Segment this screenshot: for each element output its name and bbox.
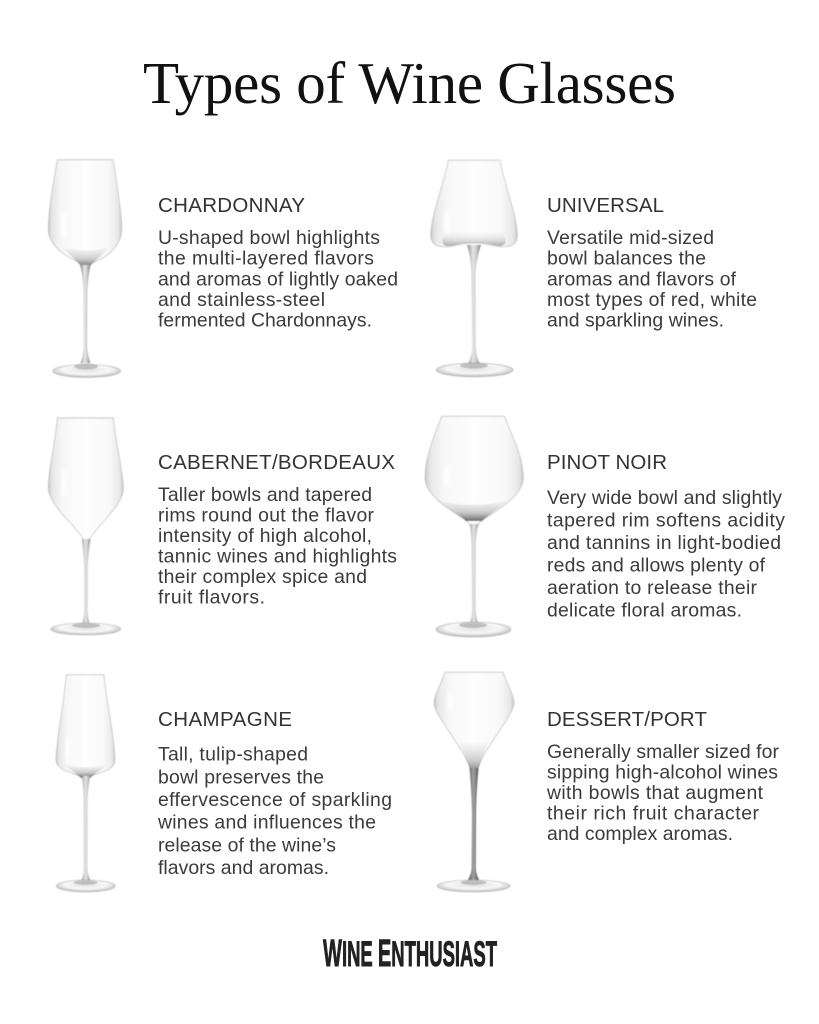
heading: cabernet bordeaux: CABERNET/BORDEAUX bbox=[158, 451, 395, 474]
heading: chardonnay: CHARDONNAY bbox=[158, 194, 305, 217]
text block: cabernet bordeaux: fruit flavors. bbox=[158, 586, 265, 608]
text block: universal bbox=[547, 227, 757, 332]
panel: chardonnay bbox=[48, 160, 398, 378]
icon: chardonnay glass bbox=[48, 160, 122, 378]
text block: chardonnay: and aromas of lightly oaked bbox=[158, 268, 398, 290]
text block: champagne: wines and influences the bbox=[157, 812, 376, 834]
text block: dessert port bbox=[546, 741, 780, 845]
icon: cabernet glass bbox=[48, 418, 123, 635]
panel: universal bbox=[431, 160, 757, 377]
text block: dessert port: sipping high-alcohol wines bbox=[547, 762, 778, 784]
heading: dessert port: DESSERT/PORT bbox=[547, 708, 707, 731]
text block: champagne: effervescence of sparkling bbox=[158, 789, 392, 811]
text block: pinot noir: delicate floral aromas. bbox=[547, 600, 742, 622]
icon: champagne glass bbox=[56, 674, 115, 892]
text block: dessert port: and complex aromas. bbox=[547, 823, 733, 845]
text block: universal: and sparkling wines. bbox=[547, 310, 724, 332]
heading: champagne: CHAMPAGNE bbox=[158, 708, 292, 731]
text block: dessert port: with bowls that augment bbox=[546, 782, 764, 804]
text block: champagne: release of the wine’s bbox=[158, 834, 336, 856]
text block: cabernet bordeaux: rims round out the flavor bbox=[158, 504, 375, 526]
text block: dessert port: Generally smaller sized for bbox=[547, 741, 780, 763]
text block: pinot noir: reds and allows plenty of bbox=[547, 554, 766, 576]
text block: pinot noir: and tannins in light-bodied bbox=[547, 532, 781, 554]
text block: chardonnay: fermented Chardonnays. bbox=[158, 310, 372, 332]
icon: pinot noir glass bbox=[425, 416, 523, 637]
text block: dessert port: their rich fruit character bbox=[547, 802, 760, 824]
text block: pinot noir: tapered rim softens acidity bbox=[547, 510, 785, 532]
text block: champagne: bowl preserves the bbox=[158, 766, 324, 788]
text block: universal: most types of red, white bbox=[547, 289, 757, 311]
text block: champagne: Tall, tulip-shaped bbox=[158, 744, 308, 766]
panel: champagne bbox=[56, 674, 392, 892]
icon: universal glass bbox=[431, 160, 517, 377]
panel: pinot noir bbox=[425, 416, 785, 637]
text block: cabernet bordeaux bbox=[158, 484, 397, 608]
text block: pinot noir bbox=[547, 487, 785, 622]
text block: cabernet bordeaux: their complex spice and bbox=[158, 566, 367, 588]
text block: cabernet bordeaux: Taller bowls and tapered bbox=[158, 484, 372, 506]
text block: pinot noir: Very wide bowl and slightly bbox=[547, 487, 782, 509]
title: Types of Wine Glasses bbox=[143, 50, 676, 116]
text block: chardonnay: U-shaped bowl highlights bbox=[158, 227, 380, 249]
heading: universal: UNIVERSAL bbox=[547, 194, 664, 217]
panel: dessert port bbox=[434, 672, 780, 892]
heading: pinot noir: PINOT NOIR bbox=[547, 451, 667, 474]
text block: champagne: flavors and aromas. bbox=[158, 857, 329, 879]
text block: champagne bbox=[157, 744, 392, 879]
logo: wine enthusiast: WINE ENTHUSIAST bbox=[323, 933, 497, 975]
text block: chardonnay: the multi-layered flavors bbox=[158, 248, 374, 270]
text block: chardonnay bbox=[158, 227, 398, 332]
text block: cabernet bordeaux: tannic wines and highlights bbox=[158, 546, 397, 568]
text block: cabernet bordeaux: intensity of high alcohol, bbox=[158, 525, 372, 547]
text block: chardonnay: and stainless-steel bbox=[158, 289, 325, 311]
text block: universal: aromas and flavors of bbox=[547, 268, 737, 290]
text block: pinot noir: aeration to release their bbox=[547, 577, 758, 599]
text block: universal: Versatile mid-sized bbox=[547, 227, 714, 249]
icon: dessert glass bbox=[434, 672, 514, 892]
panel: cabernet bordeaux bbox=[48, 418, 397, 635]
text block: universal: bowl balances the bbox=[547, 248, 706, 270]
